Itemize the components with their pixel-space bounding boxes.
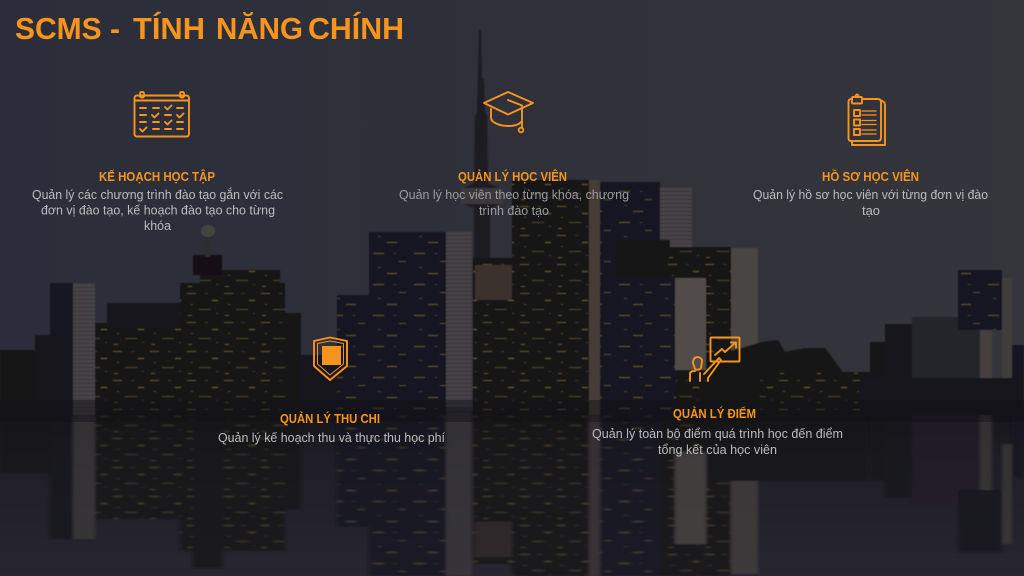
description: Quản lý hồ sơ học viên với từng đơn vị đào [753,188,988,202]
description [399,188,629,218]
panel: hồ sơ học viên [753,94,988,218]
description: khóa [144,219,171,233]
icon: calendar [134,92,189,136]
title: CHÍNH [308,11,404,46]
heading: QUẢN LÝ ĐIỂM [673,406,756,421]
description: Quản lý học viên theo từng khóa, chương [399,188,629,202]
description [753,188,988,218]
description [32,187,283,233]
icon: clipboard checklist [848,94,885,145]
icon: presenter with chart [690,338,740,381]
heading: QUẢN LÝ HỌC VIÊN [458,169,567,184]
panel: quản lý thu chi [218,338,446,445]
panel: kế hoạch học tập [32,92,283,233]
description: tạo [862,204,880,218]
description: Quản lý kế hoạch thu và thực thu học phí [218,431,446,445]
description: tổng kết của học viên [658,443,777,457]
panel: quản lý học viên [399,92,629,218]
panel: quản lý điểm [592,338,843,457]
description: trình đào tạo [479,204,549,218]
icon: graduation cap [484,92,533,132]
heading: QUẢN LÝ THU CHI [280,411,380,426]
title: SCMS - [15,12,120,46]
description: Quản lý toàn bộ điểm quá trình học đến điểm [592,427,843,441]
icon: shield [314,338,347,380]
title: NĂNG [216,11,303,46]
heading: HỒ SƠ HỌC VIÊN [822,169,919,184]
description [592,427,843,457]
description: Quản lý các chương trình đào tạo gắn với các [32,187,283,202]
title: TÍNH [133,11,205,46]
description: đơn vị đào tạo, kế hoạch đào tạo cho từng [41,204,275,218]
heading: KẾ HOẠCH HỌC TẬP [99,169,215,184]
